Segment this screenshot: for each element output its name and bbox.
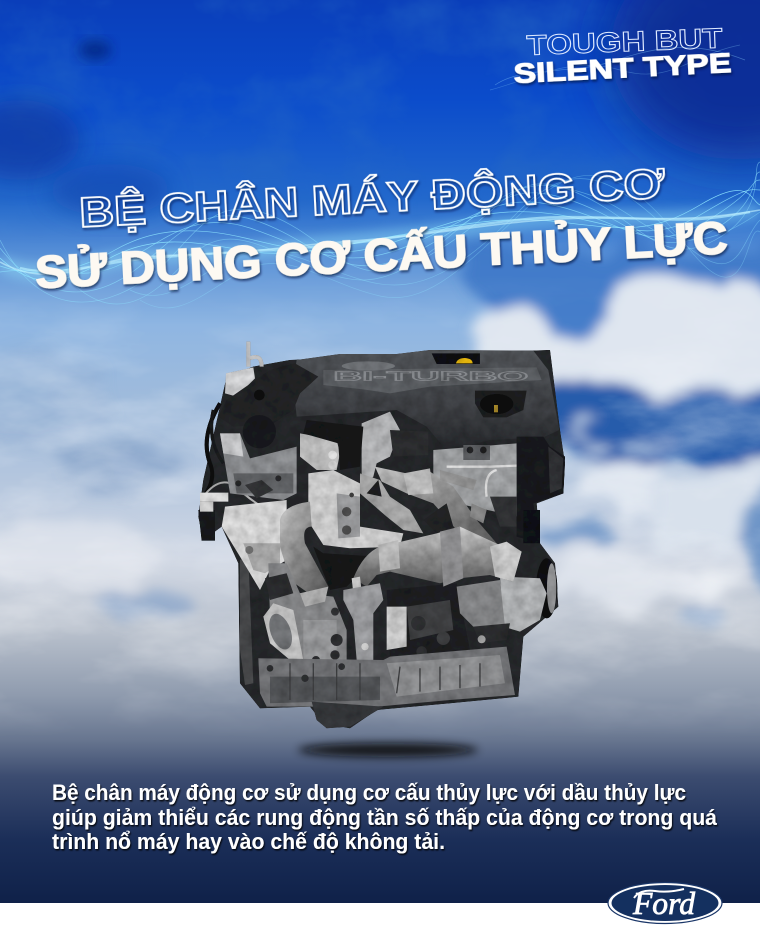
right belt and sensor [517, 437, 565, 543]
main intake horizontal pipe [353, 527, 522, 587]
Ford logo [608, 882, 722, 924]
title line 2 solid: SỬ DỤNG CƠ CẤU THỦY LỰC [34, 212, 729, 298]
centre dark bay [387, 583, 470, 660]
BI-TURBO lettering: BI-TURBO [333, 369, 528, 384]
upper turbo housing [362, 412, 400, 490]
top cover [293, 350, 559, 451]
left manifold [222, 500, 287, 590]
lower turbo housing right [457, 580, 505, 630]
vertical left pipe [280, 502, 328, 597]
body text: trình nổ máy hay vào chế độ không tải. [52, 829, 445, 854]
body text: Bệ chân máy động cơ sử dụng cơ cấu thủy lực với dầu thủy lực [52, 780, 686, 805]
Ford logo: Ford [632, 885, 696, 921]
title [34, 158, 729, 298]
badge line 2 solid: SILENT TYPE [513, 47, 732, 89]
engine shadow [298, 743, 478, 757]
white footer band [0, 903, 760, 950]
upper intake pipe [375, 467, 497, 553]
oil pan [312, 702, 383, 728]
body text [52, 780, 717, 854]
oil filler openings [432, 353, 480, 364]
badge line 1 outlined: TOUGH BUT [526, 22, 723, 61]
lower block [258, 647, 515, 707]
flywheel [240, 557, 253, 685]
right upper block [433, 443, 518, 517]
badge: Tough but silent type [513, 22, 732, 89]
left bracket and hoses [248, 342, 262, 367]
engine illustration [198, 342, 565, 728]
engine silhouette [198, 350, 565, 728]
lower left turbo [268, 563, 347, 660]
left upper block [220, 433, 297, 500]
body text: giúp giảm thiểu các rung động tần số thấp của động cơ trong quá [52, 805, 717, 830]
sound wave ribbon behind title [0, 45, 760, 308]
main turbo body [308, 470, 403, 548]
title line 1 outlined: BỆ CHÂN MÁY ĐỘNG CƠ [78, 158, 666, 236]
central vertical pipe [343, 583, 383, 660]
